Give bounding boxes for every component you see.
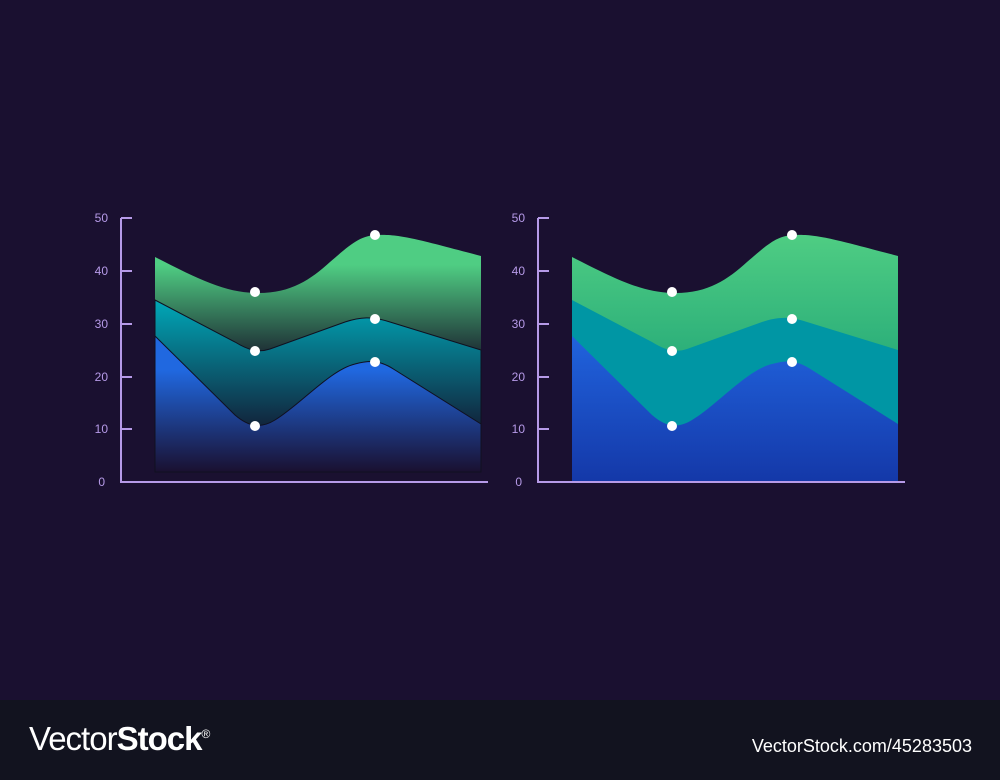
right axis labels: 10 xyxy=(512,422,525,436)
image id: VectorStock.com/45283503 xyxy=(752,736,972,756)
right axis labels: 0 xyxy=(515,475,522,489)
right points xyxy=(667,230,797,431)
left green area xyxy=(155,235,481,472)
left axis labels: 40 xyxy=(95,264,108,278)
right axes xyxy=(538,218,905,482)
left blue area xyxy=(155,336,481,472)
right blue area xyxy=(572,336,898,482)
right axis labels: 50 xyxy=(512,211,525,225)
right axis labels: 30 xyxy=(512,317,525,331)
left axis labels: 10 xyxy=(95,422,108,436)
left axis labels: 20 xyxy=(95,370,108,384)
left axes xyxy=(121,218,488,482)
right chart xyxy=(512,211,905,489)
right axis labels: 40 xyxy=(512,264,525,278)
right axis labels xyxy=(512,211,525,489)
left axis labels xyxy=(95,211,108,489)
left chart xyxy=(95,211,488,489)
right teal area xyxy=(572,300,898,482)
right green area xyxy=(572,235,898,482)
right axis labels: 20 xyxy=(512,370,525,384)
left points xyxy=(250,230,380,431)
left teal area xyxy=(155,300,481,472)
left axis labels: 30 xyxy=(95,317,108,331)
logo: VectorStock® xyxy=(29,720,209,757)
footer xyxy=(0,700,1000,780)
left axis labels: 50 xyxy=(95,211,108,225)
left axis labels: 0 xyxy=(98,475,105,489)
